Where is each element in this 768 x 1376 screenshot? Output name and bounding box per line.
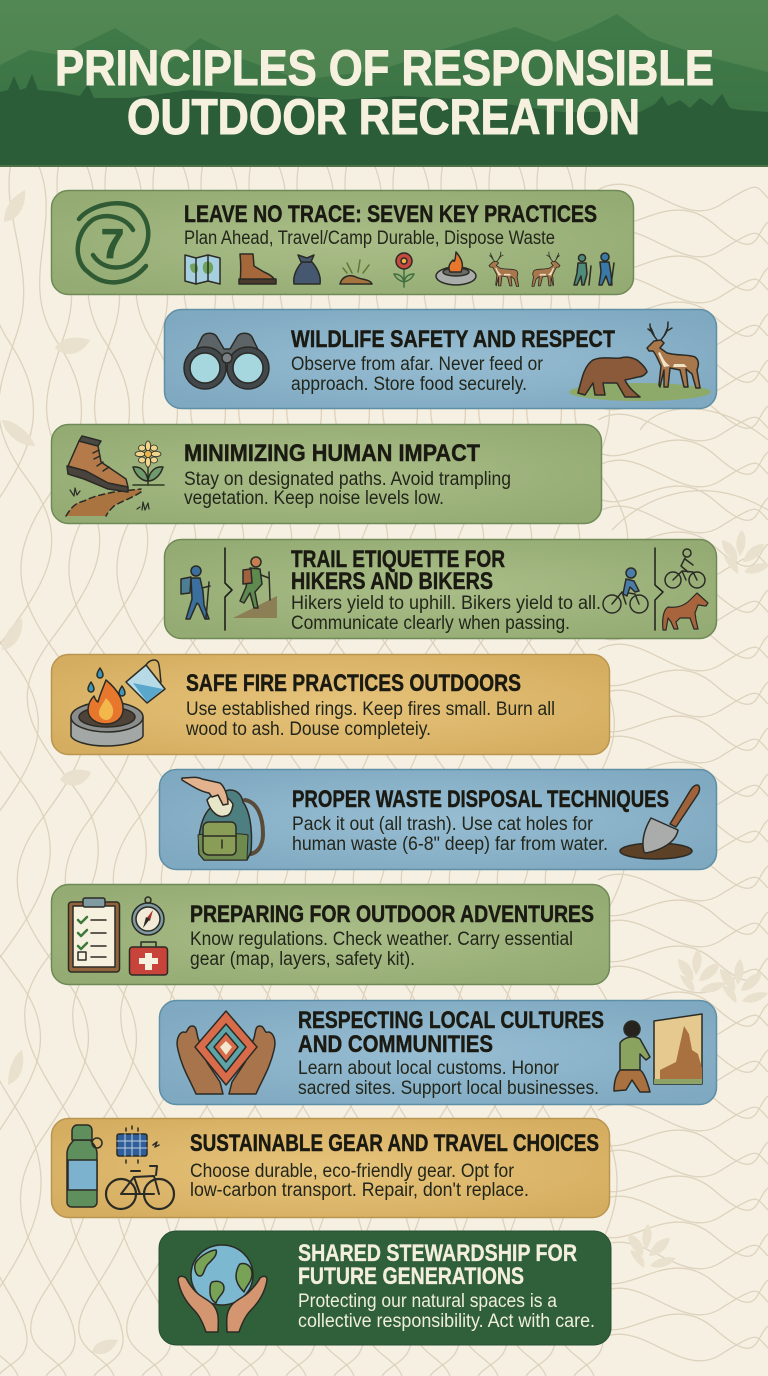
text <box>291 593 601 634</box>
title <box>55 40 714 145</box>
title: OUTDOOR RECREATION <box>127 89 640 145</box>
text: wood to ash. Douse completeiy. <box>185 719 431 740</box>
icon: bear and deer <box>569 322 711 401</box>
text <box>190 929 573 970</box>
text: Protecting our natural spaces is a <box>298 1291 557 1312</box>
text: Observe from afar. Never feed or <box>291 354 544 375</box>
panel: leave no trace <box>52 190 634 294</box>
icon: seven badge <box>78 203 148 282</box>
icon row: seven practices <box>185 252 614 287</box>
text: gear (map, layers, safety kit). <box>190 949 415 970</box>
heading: AND COMMUNITIES <box>298 1031 493 1058</box>
mountain range <box>0 14 768 166</box>
icon: hands holding textile <box>177 1011 275 1094</box>
heading <box>298 1240 577 1290</box>
text: vegetation. Keep noise levels low. <box>184 488 444 509</box>
heading: PREPARING FOR OUTDOOR ADVENTURES <box>190 901 594 928</box>
panel: safe fire practices <box>52 654 610 754</box>
panel: trail etiquette <box>164 540 716 638</box>
panel: shared stewardship <box>159 1231 611 1345</box>
dark forest ridge <box>0 74 768 166</box>
text <box>185 699 555 740</box>
icon: binoculars <box>184 333 269 389</box>
heading: WILDLIFE SAFETY AND RESPECT <box>291 326 615 353</box>
heading: TRAIL ETIQUETTE FOR <box>291 546 505 573</box>
text: Stay on designated paths. Avoid trampling <box>184 469 511 490</box>
heading: SUSTAINABLE GEAR AND TRAVEL CHOICES <box>190 1130 599 1157</box>
text: Plan Ahead, Travel/Camp Durable, Dispose Waste <box>184 228 555 249</box>
icon: boot on trail <box>66 436 164 516</box>
heading: SHARED STEWARDSHIP FOR <box>298 1240 577 1267</box>
heading: SAFE FIRE PRACTICES OUTDOORS <box>186 670 521 697</box>
text: human waste (6-8" deep) far from water. <box>292 834 608 855</box>
text <box>292 814 608 855</box>
panel: wildlife safety <box>164 310 716 408</box>
text: Use established rings. Keep fires small. Burn all <box>186 699 555 720</box>
text <box>298 1058 599 1099</box>
text: sacred sites. Support local businesses. <box>298 1078 599 1099</box>
text <box>184 469 511 509</box>
panel: preparing for adventures <box>52 884 610 984</box>
icon: hikers yielding <box>181 548 277 630</box>
text <box>291 354 544 395</box>
text <box>190 1161 529 1201</box>
heading: LEAVE NO TRACE: SEVEN KEY PRACTICES <box>184 201 597 228</box>
header banner with mountains <box>0 0 768 167</box>
heading <box>291 546 505 595</box>
text: Know regulations. Check weather. Carry essential <box>190 929 573 950</box>
text: Pack it out (all trash). Use cat holes for <box>292 814 594 835</box>
text: approach. Store food securely. <box>291 374 527 395</box>
icon: trowel in soil <box>620 785 700 859</box>
icon: checklist, compass, first aid <box>68 897 168 975</box>
heading: RESPECTING LOCAL CULTURES <box>298 1007 604 1034</box>
panel: minimizing human impact <box>52 424 602 524</box>
heading: PROPER WASTE DISPOSAL TECHNIQUES <box>292 786 669 813</box>
text: collective responsibility. Act with care. <box>298 1311 595 1332</box>
heading: MINIMIZING HUMAN IMPACT <box>184 440 480 467</box>
text: Choose durable, eco-friendly gear. Opt for <box>190 1161 515 1182</box>
text: Learn about local customs. Honor <box>298 1058 560 1079</box>
text: Communicate clearly when passing. <box>291 613 570 634</box>
heading: HIKERS AND BIKERS <box>291 568 493 595</box>
heading: FUTURE GENERATIONS <box>298 1263 524 1290</box>
panel: respecting local cultures <box>160 1000 716 1104</box>
icon: backpack and hand <box>182 777 263 860</box>
panel: waste disposal <box>160 770 716 870</box>
icon: globe in hands <box>178 1245 267 1332</box>
text: Hikers yield to uphill. Bikers yield to all. <box>291 593 601 614</box>
icon: fire ring and water <box>71 660 165 746</box>
heading <box>298 1007 604 1058</box>
text: low-carbon transport. Repair, don't replace. <box>190 1180 529 1201</box>
icon: bottle, solar, bike <box>67 1125 174 1209</box>
icon: bikers and horse <box>603 548 708 630</box>
text <box>298 1291 595 1332</box>
icon: seven badge: 7 <box>101 220 124 267</box>
icon: person at rock art <box>614 1014 702 1092</box>
panel: sustainable gear <box>52 1118 610 1218</box>
